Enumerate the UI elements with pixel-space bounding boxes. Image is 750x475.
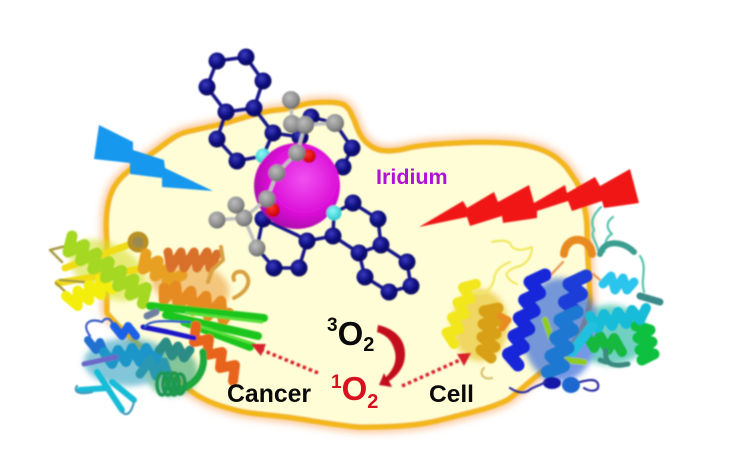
red lightning bolt — [419, 169, 639, 227]
purple strand — [84, 357, 116, 364]
protein left — [50, 226, 264, 414]
curved arrow from triplet to singlet oxygen — [377, 325, 405, 387]
blue ligand bonds — [207, 57, 352, 167]
lime strand — [545, 320, 584, 362]
grey ligand bonds — [217, 100, 335, 248]
cell body with glowing outline — [106, 102, 590, 427]
blue strand — [143, 327, 194, 338]
teal loops lower — [600, 350, 628, 365]
thin yellow loop — [470, 241, 532, 294]
cyan strands — [80, 372, 134, 410]
iridium complex molecule — [198, 48, 420, 300]
teal top helix — [600, 243, 634, 254]
colour underlay right — [452, 278, 648, 382]
tan linker and loop — [208, 247, 248, 298]
label: singlet oxygen: 2 — [367, 391, 378, 413]
nitrogen upper — [256, 148, 270, 164]
dotted arrow to right — [402, 353, 471, 386]
label: triplet oxygen: O — [338, 315, 363, 352]
colour underlay left — [59, 226, 235, 396]
green beta strands — [150, 306, 264, 347]
thin blue loops — [86, 319, 190, 336]
upper blue atoms — [198, 48, 360, 176]
iridium sphere — [254, 143, 340, 229]
green ribbon — [172, 352, 204, 392]
orange top turn — [564, 240, 592, 254]
label: Cell: Cell — [429, 381, 474, 408]
lower blue atoms — [266, 194, 420, 300]
label: Cancer: Cancer — [227, 381, 311, 408]
label: triplet oxygen: 2 — [363, 334, 374, 356]
orange middle helix — [164, 286, 229, 321]
label: singlet oxygen: O — [342, 370, 367, 407]
thin loops — [50, 246, 84, 298]
mid-blue helix upper — [564, 276, 586, 312]
lower blue atoms behind sphere — [254, 210, 316, 250]
yellow helix — [446, 284, 476, 344]
oxygen atoms — [266, 149, 316, 217]
teal-blue domain — [104, 348, 160, 364]
yellow beta strands — [58, 240, 145, 283]
teal loops — [592, 207, 644, 292]
label: singlet oxygen: 1 — [331, 372, 342, 393]
grey-blue start — [147, 312, 156, 316]
yellow-green helix — [68, 236, 146, 304]
mid-blue helix lower — [548, 312, 577, 372]
blue helix — [508, 275, 545, 365]
cyan helices — [603, 276, 634, 290]
gold helix — [143, 254, 182, 283]
dotted arrow to left — [251, 344, 318, 373]
gold turn — [130, 234, 146, 250]
lower ligand bonds — [257, 203, 411, 292]
cyan ribbon — [572, 326, 592, 352]
green helices — [636, 326, 654, 360]
green coil — [157, 373, 185, 395]
label: Iridium: Iridium — [376, 165, 448, 189]
orange top helix — [168, 252, 217, 268]
yellow helix — [66, 280, 112, 306]
label: triplet oxygen: 3 — [327, 315, 338, 336]
thin dark loop — [510, 380, 598, 392]
blue bottom blob — [562, 377, 580, 393]
blue helix — [114, 326, 136, 336]
gold helix — [481, 308, 498, 358]
nitrogen lower — [326, 206, 342, 220]
protein right — [446, 207, 660, 393]
blue lightning bolt — [94, 125, 213, 191]
orange-red helix — [194, 326, 235, 381]
grey atoms — [208, 91, 344, 256]
cyan long helix — [590, 308, 646, 328]
